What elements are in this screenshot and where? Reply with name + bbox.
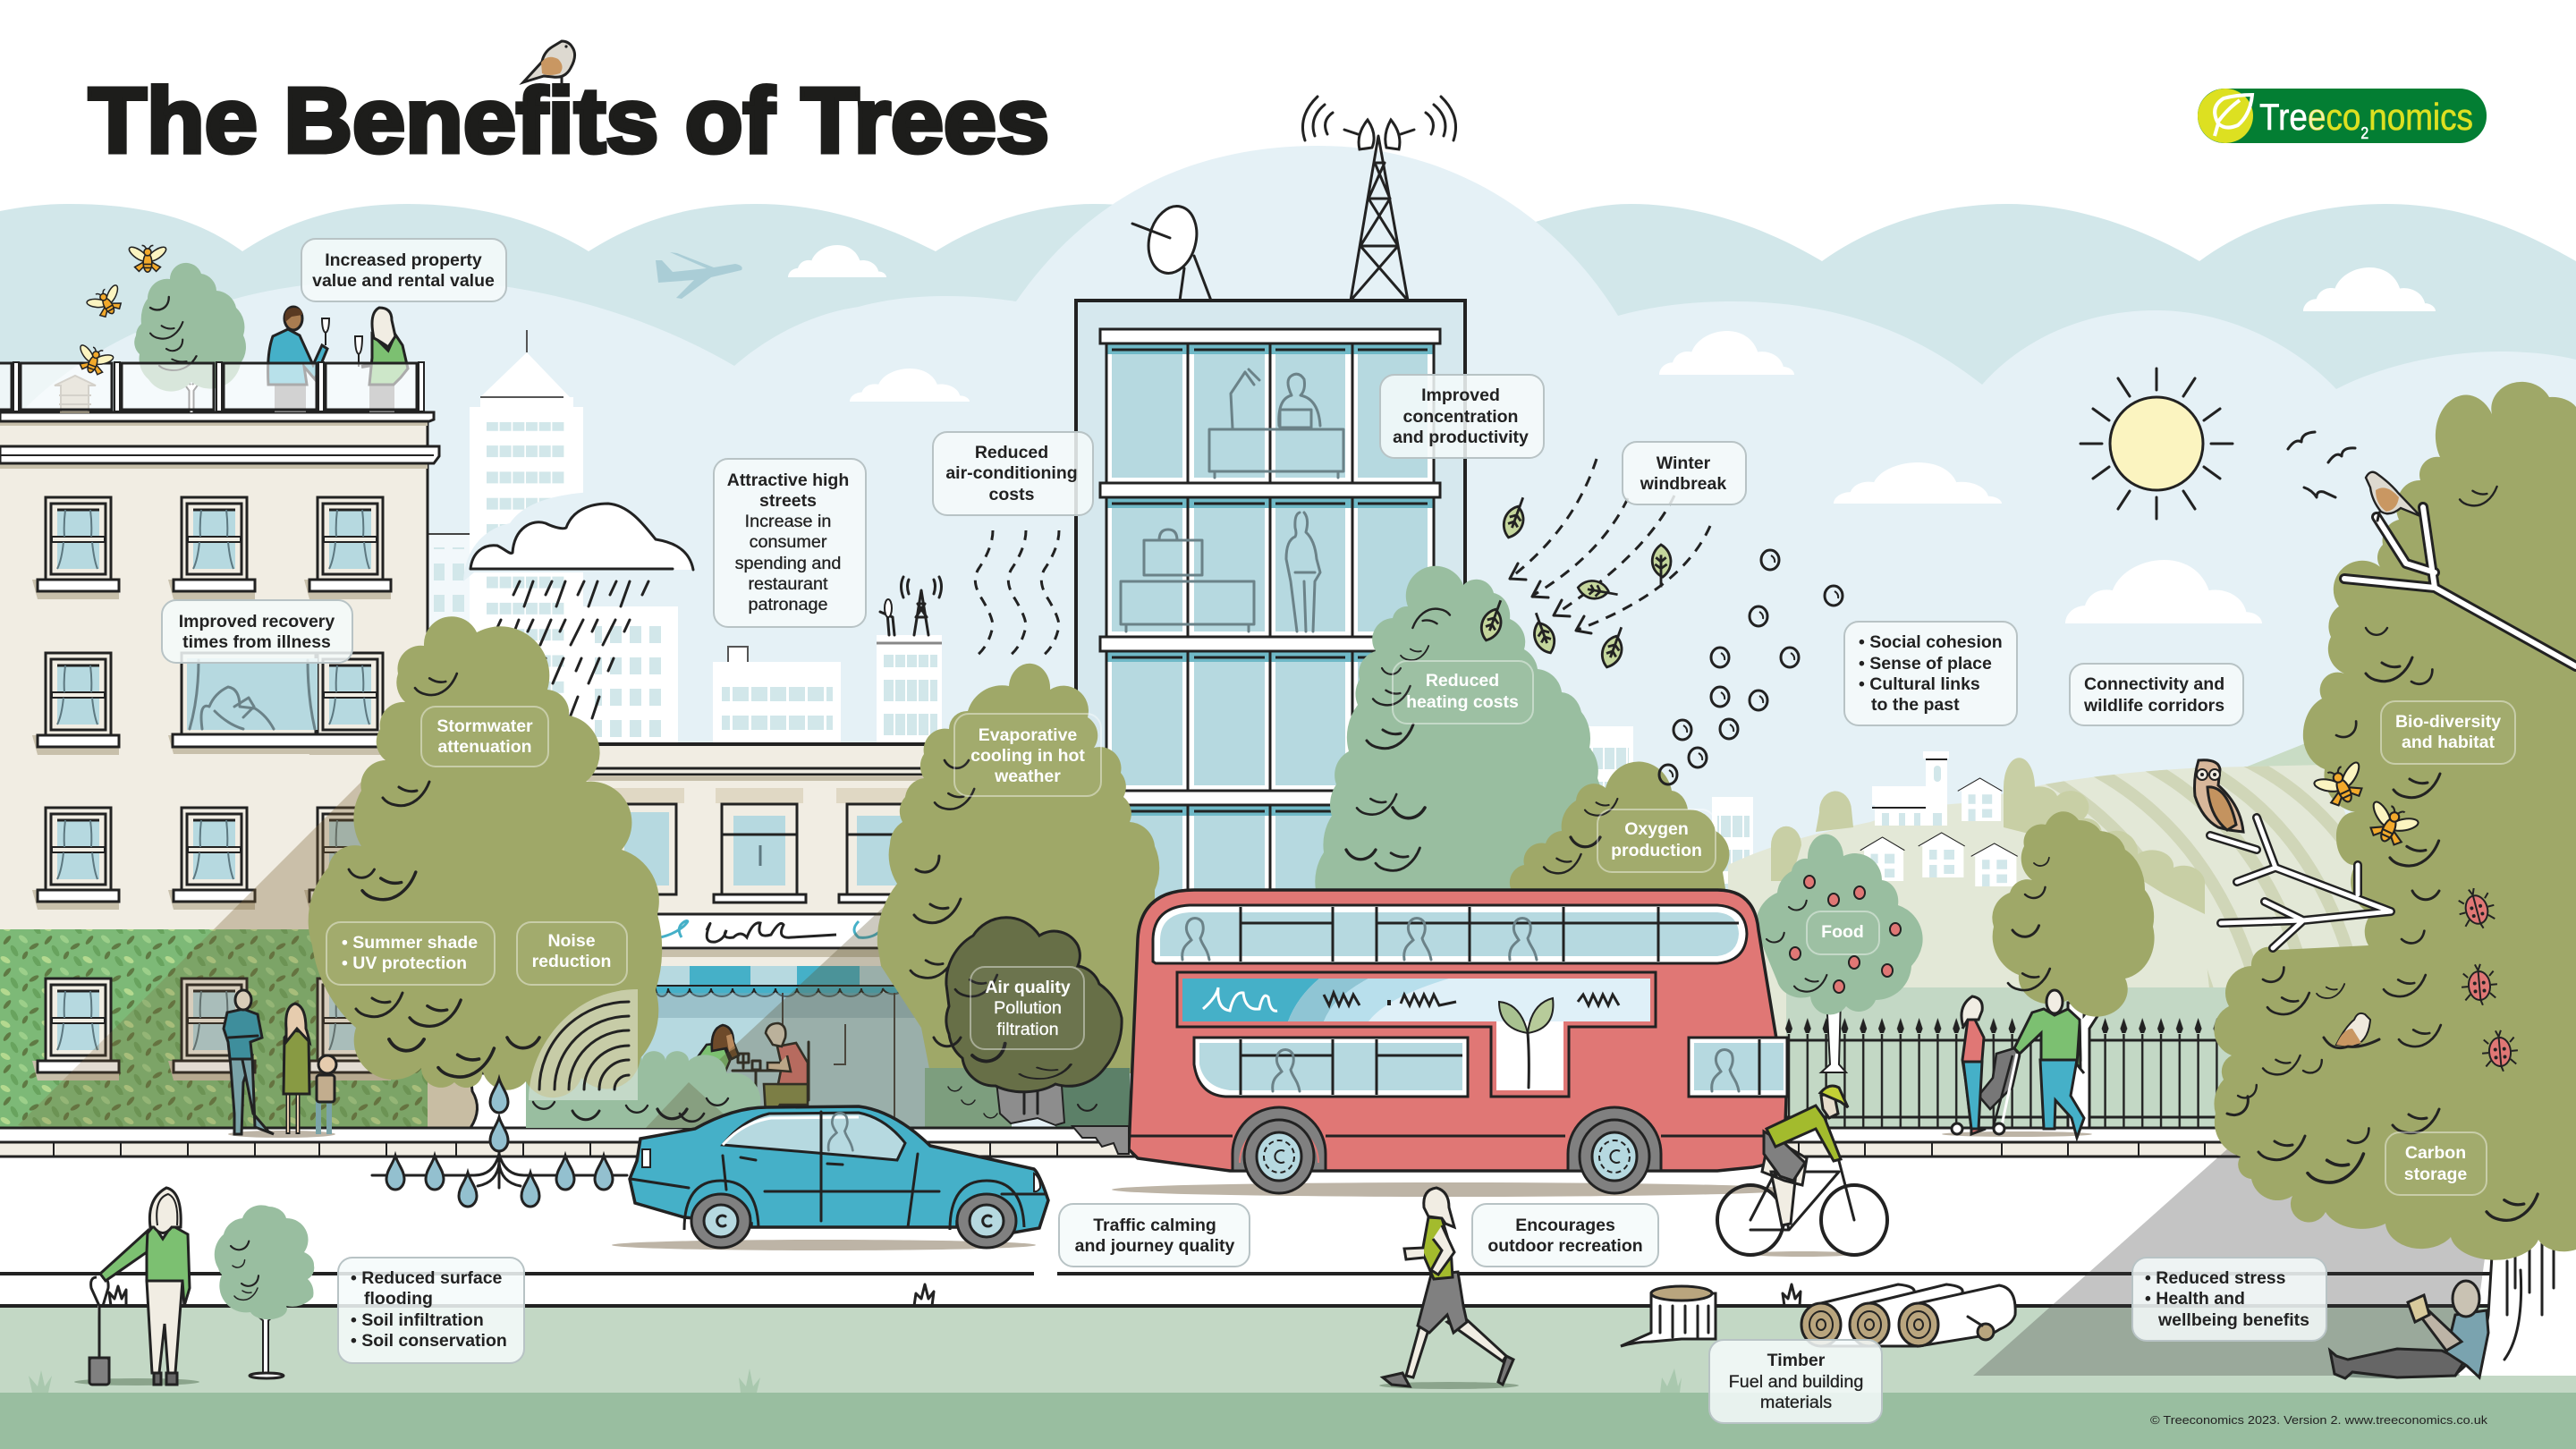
ground-floor windows [32, 979, 391, 1080]
icon: sun [2080, 369, 2233, 519]
office floors [1100, 329, 1440, 959]
icon: aeroplane [656, 252, 742, 299]
woman legs [1963, 1062, 1982, 1129]
tree: reduced heating costs [1315, 566, 1637, 890]
tree trunk with root drop [470, 1073, 535, 1128]
heat waves [973, 530, 1059, 658]
label: recovery times: Improved recovery [179, 612, 335, 631]
pushchair [1952, 1048, 2020, 1134]
leaf curls [2227, 487, 2538, 1220]
label: reduced stress: • Reduced stress [2145, 1268, 2286, 1288]
tree: air quality [934, 918, 1122, 1092]
icon: plant [1499, 998, 1553, 1088]
log 1 [1801, 1284, 1914, 1346]
label: air quality [970, 967, 1084, 1049]
car lights [642, 1149, 1040, 1191]
spade [89, 1277, 109, 1385]
label: connectivity [2070, 664, 2243, 725]
cafe door [783, 993, 894, 1128]
bus shadow [1112, 1182, 1795, 1197]
label: surface flooding: flooding [364, 1289, 433, 1309]
wall shadow of tree [214, 760, 501, 929]
roof tree [134, 263, 246, 412]
label: high streets: restaurant [748, 574, 828, 594]
icon: noise sound waves [529, 989, 638, 1100]
icon: bird in tree [2324, 1013, 2379, 1048]
label: summer shade [326, 922, 495, 985]
label: stormwater [421, 707, 548, 767]
label: evaporative cooling [954, 714, 1101, 796]
label: biodiversity [2381, 701, 2515, 764]
label: social cohesion: to the past [1871, 695, 1960, 715]
icon: beehive [55, 376, 96, 412]
label: noise reduction: reduction [532, 952, 611, 971]
shadow under big tree [1973, 1148, 2500, 1376]
label: concentration: and productivity [1393, 428, 1529, 447]
icon: bird perched on title [523, 41, 575, 84]
label: surface flooding: • Reduced surface [351, 1268, 503, 1288]
shaded gap beside hedge [428, 929, 501, 1128]
label: surface flooding [338, 1258, 524, 1363]
icon: oxygen bubbles [1659, 550, 1843, 784]
footer credit: © Treeconomics 2023. Version 2. www.treeconomics.co.uk [2150, 1413, 2488, 1427]
label: heating costs [1393, 661, 1533, 724]
lower deck windows [1194, 1038, 1787, 1097]
person: reader against tree [2330, 1281, 2488, 1378]
label: reduced stress: wellbeing benefits [2157, 1310, 2309, 1330]
water drops and roots [372, 1079, 627, 1207]
person: woman at cafe [695, 1025, 739, 1078]
log 3 [1899, 1285, 2015, 1346]
timber logs [1801, 1284, 2015, 1346]
label: noise reduction: Noise [547, 931, 596, 951]
icon: birds in sky [2288, 432, 2355, 497]
family on pavement [224, 990, 336, 1138]
glass balustrade [0, 362, 424, 411]
person: man at cafe [764, 1023, 809, 1114]
label: surface flooding: • Soil infiltration [351, 1310, 484, 1330]
low hedge by shop [526, 1051, 760, 1128]
label: air conditioning: costs [989, 485, 1035, 504]
label: timber: materials [1760, 1393, 1832, 1412]
rain cloud [463, 491, 707, 720]
label: air conditioning: air-conditioning [945, 463, 1078, 483]
people with pushchair [1942, 990, 2092, 1138]
logo wordmark: nomics [2368, 96, 2473, 138]
person: man with glass [268, 307, 329, 412]
roof slab [0, 412, 434, 421]
label: timber [1709, 1340, 1882, 1423]
label: high streets: spending and [735, 554, 841, 573]
label: evaporative cooling: weather [994, 767, 1061, 786]
icon: ladybirds [2453, 885, 2520, 1073]
upper branch [2344, 507, 2576, 666]
label: evaporative cooling: Evaporative [979, 725, 1077, 745]
label: traffic calming: Traffic calming [1093, 1216, 1216, 1235]
label: high streets [714, 459, 866, 627]
front wheel [1233, 1107, 1326, 1193]
ground strip [0, 1306, 2576, 1393]
tree: oxygen production [1510, 761, 1729, 894]
label: oxygen: Oxygen [1624, 819, 1689, 839]
label: air conditioning: Reduced [975, 443, 1048, 462]
icon: bees left [72, 244, 168, 379]
front car wheel [684, 1181, 758, 1248]
icon: far hill [2245, 716, 2361, 769]
tree: evaporative cooling [877, 664, 1159, 1073]
shop tree shadow [646, 894, 930, 1128]
label: concentration: Improved [1421, 386, 1500, 405]
label: air quality: filtration [996, 1020, 1059, 1039]
windows [32, 497, 391, 910]
label: heating costs: heating costs [1406, 692, 1519, 712]
label: surface flooding: • Soil conservation [351, 1331, 507, 1351]
road and pavement [0, 1128, 2576, 1449]
car shadow [612, 1240, 1036, 1250]
bottom band [0, 1393, 2576, 1449]
woman head [1962, 996, 1982, 1029]
cafe couple [695, 1023, 809, 1114]
icon: robin on upper branch [2366, 472, 2420, 521]
label: traffic calming: and journey quality [1075, 1236, 1235, 1256]
label: carbon storage: storage [2404, 1165, 2467, 1184]
label: carbon storage [2385, 1132, 2487, 1195]
park tree [1992, 811, 2155, 1128]
advertising panel [1177, 972, 1656, 1097]
label: concentration: concentration [1403, 407, 1518, 427]
office tower with satellite dish and mast [1076, 97, 1465, 959]
label: evaporative cooling: cooling in hot [970, 746, 1085, 766]
label: oxygen: production [1611, 841, 1702, 860]
young tree [215, 1205, 314, 1378]
label: air conditioning [933, 432, 1093, 515]
label: recovery times: times from illness [182, 632, 331, 652]
label: windbreak: windbreak [1640, 474, 1726, 494]
label: property value: Increased property [325, 250, 482, 270]
front hills [0, 146, 2576, 1163]
bus body [1129, 890, 1786, 1171]
person: child [317, 1055, 336, 1134]
label: outdoor recreation [1472, 1204, 1658, 1267]
label: biodiversity: Bio-diversity [2395, 712, 2501, 732]
icon: leaves [1477, 494, 1671, 670]
label: summer shade: • Summer shade [342, 933, 478, 953]
striped field [2045, 766, 2353, 987]
clouds [788, 245, 2436, 623]
label: social cohesion: • Sense of place [1859, 654, 1992, 674]
high street shop building [428, 744, 930, 1129]
food tree [1756, 835, 1923, 1072]
person: runner [1379, 1188, 1519, 1389]
person: woman in dress [284, 1004, 309, 1134]
cafe table [733, 1054, 780, 1114]
label: biodiversity: and habitat [2402, 733, 2496, 752]
logo wordmark: 2 [2360, 124, 2368, 142]
big right tree [2210, 382, 2576, 1376]
label: air quality: Air quality [985, 978, 1071, 997]
title: The Benefits of Trees [89, 69, 1049, 172]
hedge shadow of tree [18, 929, 429, 1128]
label: connectivity: wildlife corridors [2083, 696, 2224, 716]
label: high streets: Increase in [745, 512, 831, 531]
hedge [0, 929, 429, 1128]
shop sign [626, 914, 930, 957]
label: social cohesion: • Social cohesion [1859, 632, 2003, 652]
icon: bees on tree [2309, 758, 2423, 852]
label: outdoor recreation: outdoor recreation [1487, 1236, 1643, 1256]
windbreak arrows [1510, 459, 1710, 633]
treeline [2004, 758, 2205, 914]
label: property value [301, 239, 506, 301]
label: outdoor recreation: Encourages [1515, 1216, 1615, 1235]
tree: stormwater attenuation [309, 616, 760, 1128]
distant city buildings [427, 330, 1753, 895]
label: traffic calming [1059, 1204, 1250, 1267]
tree stump [1621, 1286, 1716, 1346]
shop front glass [626, 984, 930, 1128]
label: timber: Fuel and building [1729, 1372, 1863, 1392]
label: stormwater: Stormwater [436, 716, 533, 736]
exhaust smog [1072, 1126, 1129, 1154]
label: high streets: Attractive high [727, 470, 849, 490]
wide window with patient in bed [168, 653, 385, 754]
village houses [1860, 778, 2018, 886]
label: social cohesion [1844, 622, 2017, 725]
label: food [1807, 911, 1879, 954]
label: noise reduction [517, 922, 627, 985]
log 2 [1850, 1284, 1962, 1346]
lower branch [2210, 818, 2391, 948]
person: cyclist [1717, 1086, 1887, 1257]
rear car wheel [950, 1181, 1024, 1248]
label: carbon storage: Carbon [2405, 1143, 2466, 1163]
label: summer shade: • UV protection [342, 953, 467, 973]
back hills [0, 204, 2576, 805]
label: concentration [1380, 375, 1544, 458]
left apartment building [0, 412, 501, 1135]
label: connectivity: Connectivity and [2084, 674, 2224, 694]
cornice [0, 446, 439, 463]
icon: satellite dish [1132, 201, 1211, 301]
label: windbreak: Winter [1657, 453, 1711, 473]
label: stormwater: attenuation [437, 737, 532, 757]
upper deck windows [1153, 905, 1747, 963]
logo: Treeconomics [2198, 89, 2487, 143]
logo wordmark: Treeco [2259, 96, 2366, 138]
person: man arms folded [224, 990, 274, 1134]
roof terrace [0, 263, 424, 412]
label: windbreak [1623, 442, 1746, 504]
label: food: Food [1821, 922, 1864, 942]
label: property value: value and rental value [312, 271, 495, 291]
rear wheel [1568, 1107, 1661, 1193]
bush and trunk under air quality tree [925, 1068, 1130, 1128]
apples [1790, 876, 1901, 993]
label: social cohesion: • Cultural links [1859, 674, 1980, 694]
trunk [2453, 1225, 2576, 1376]
awning [656, 966, 904, 996]
label: air quality: Pollution [994, 998, 1062, 1018]
small bushes [1771, 791, 1853, 881]
person: gardener with spade [74, 1188, 199, 1385]
blue car [612, 1106, 1048, 1250]
grass tufts [29, 1368, 1682, 1393]
church [1872, 751, 1949, 826]
label: reduced stress: • Health and [2145, 1289, 2245, 1309]
rain [496, 581, 648, 720]
double decker bus [1112, 890, 1795, 1197]
label: reduced stress [2132, 1258, 2326, 1341]
person: woman with glass [355, 308, 408, 412]
countryside hill [1728, 744, 2368, 1036]
person: woman [1962, 1020, 1986, 1134]
car windows [723, 1113, 905, 1160]
label: timber: Timber [1767, 1351, 1826, 1370]
person: man [2014, 990, 2084, 1138]
office furniture and workers [1121, 369, 1343, 631]
iron park fence [1780, 987, 2251, 1128]
icon: logo leaf [2215, 95, 2252, 136]
upper shop windows [617, 804, 928, 902]
icon: owl on branch [2195, 760, 2243, 832]
label: heating costs: Reduced [1426, 671, 1499, 691]
label: high streets: patronage [748, 595, 828, 614]
label: high streets: consumer [750, 532, 827, 552]
label: high streets: streets [759, 491, 817, 511]
bush curls [533, 1098, 728, 1122]
label: oxygen [1597, 809, 1716, 872]
label: recovery times [162, 600, 352, 663]
icon: radio mast [1302, 97, 1456, 301]
